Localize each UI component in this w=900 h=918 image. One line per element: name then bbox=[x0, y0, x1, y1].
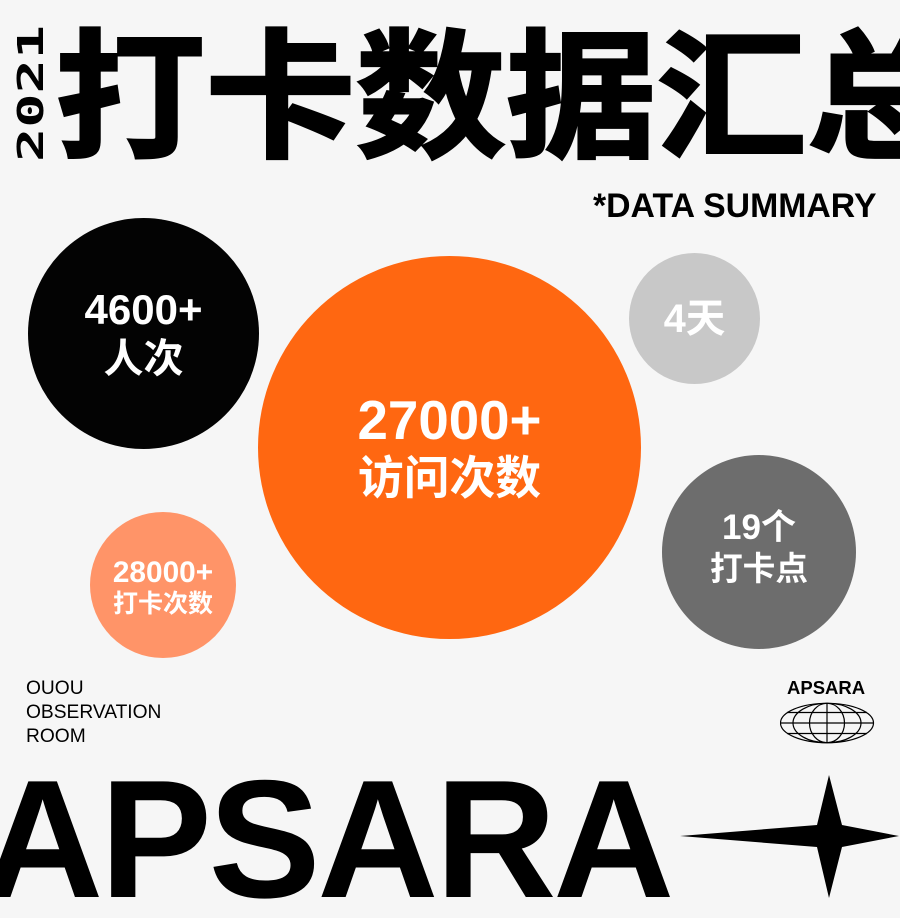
organisation text bbox=[26, 678, 161, 747]
circle: 19 check-in points bbox=[662, 455, 856, 649]
organisation text: OUOU bbox=[26, 678, 84, 698]
year label: 2021 bbox=[11, 25, 52, 162]
circle: 4 days bbox=[629, 253, 760, 384]
circle: 4600+ visits bbox=[28, 218, 259, 449]
circle: 27000+ access count: 访问次数 bbox=[358, 453, 541, 504]
circle: 19 check-in points: 19个 bbox=[722, 508, 796, 547]
subtitle: *DATA SUMMARY bbox=[593, 187, 876, 225]
organisation text: OBSERVATION bbox=[26, 702, 161, 723]
organisation text: ROOM bbox=[26, 726, 86, 747]
circle: 27000+ access count bbox=[258, 256, 641, 639]
circle: 4600+ visits: 人次 bbox=[104, 337, 184, 381]
circle: 28000+ check-ins bbox=[90, 512, 236, 658]
icon: four-point star bbox=[680, 775, 899, 898]
circle: 4 days: 4天 bbox=[664, 297, 725, 341]
icon: globe bbox=[780, 702, 874, 744]
circle: 19 check-in points: 打卡点 bbox=[710, 550, 808, 587]
circle: 27000+ access count: 27000+ bbox=[357, 389, 542, 451]
brand label: APSARA bbox=[787, 677, 865, 698]
circle: 28000+ check-ins: 打卡次数 bbox=[113, 590, 213, 618]
circle: 4600+ visits: 4600+ bbox=[85, 286, 202, 333]
circle: 28000+ check-ins: 28000+ bbox=[113, 556, 213, 589]
